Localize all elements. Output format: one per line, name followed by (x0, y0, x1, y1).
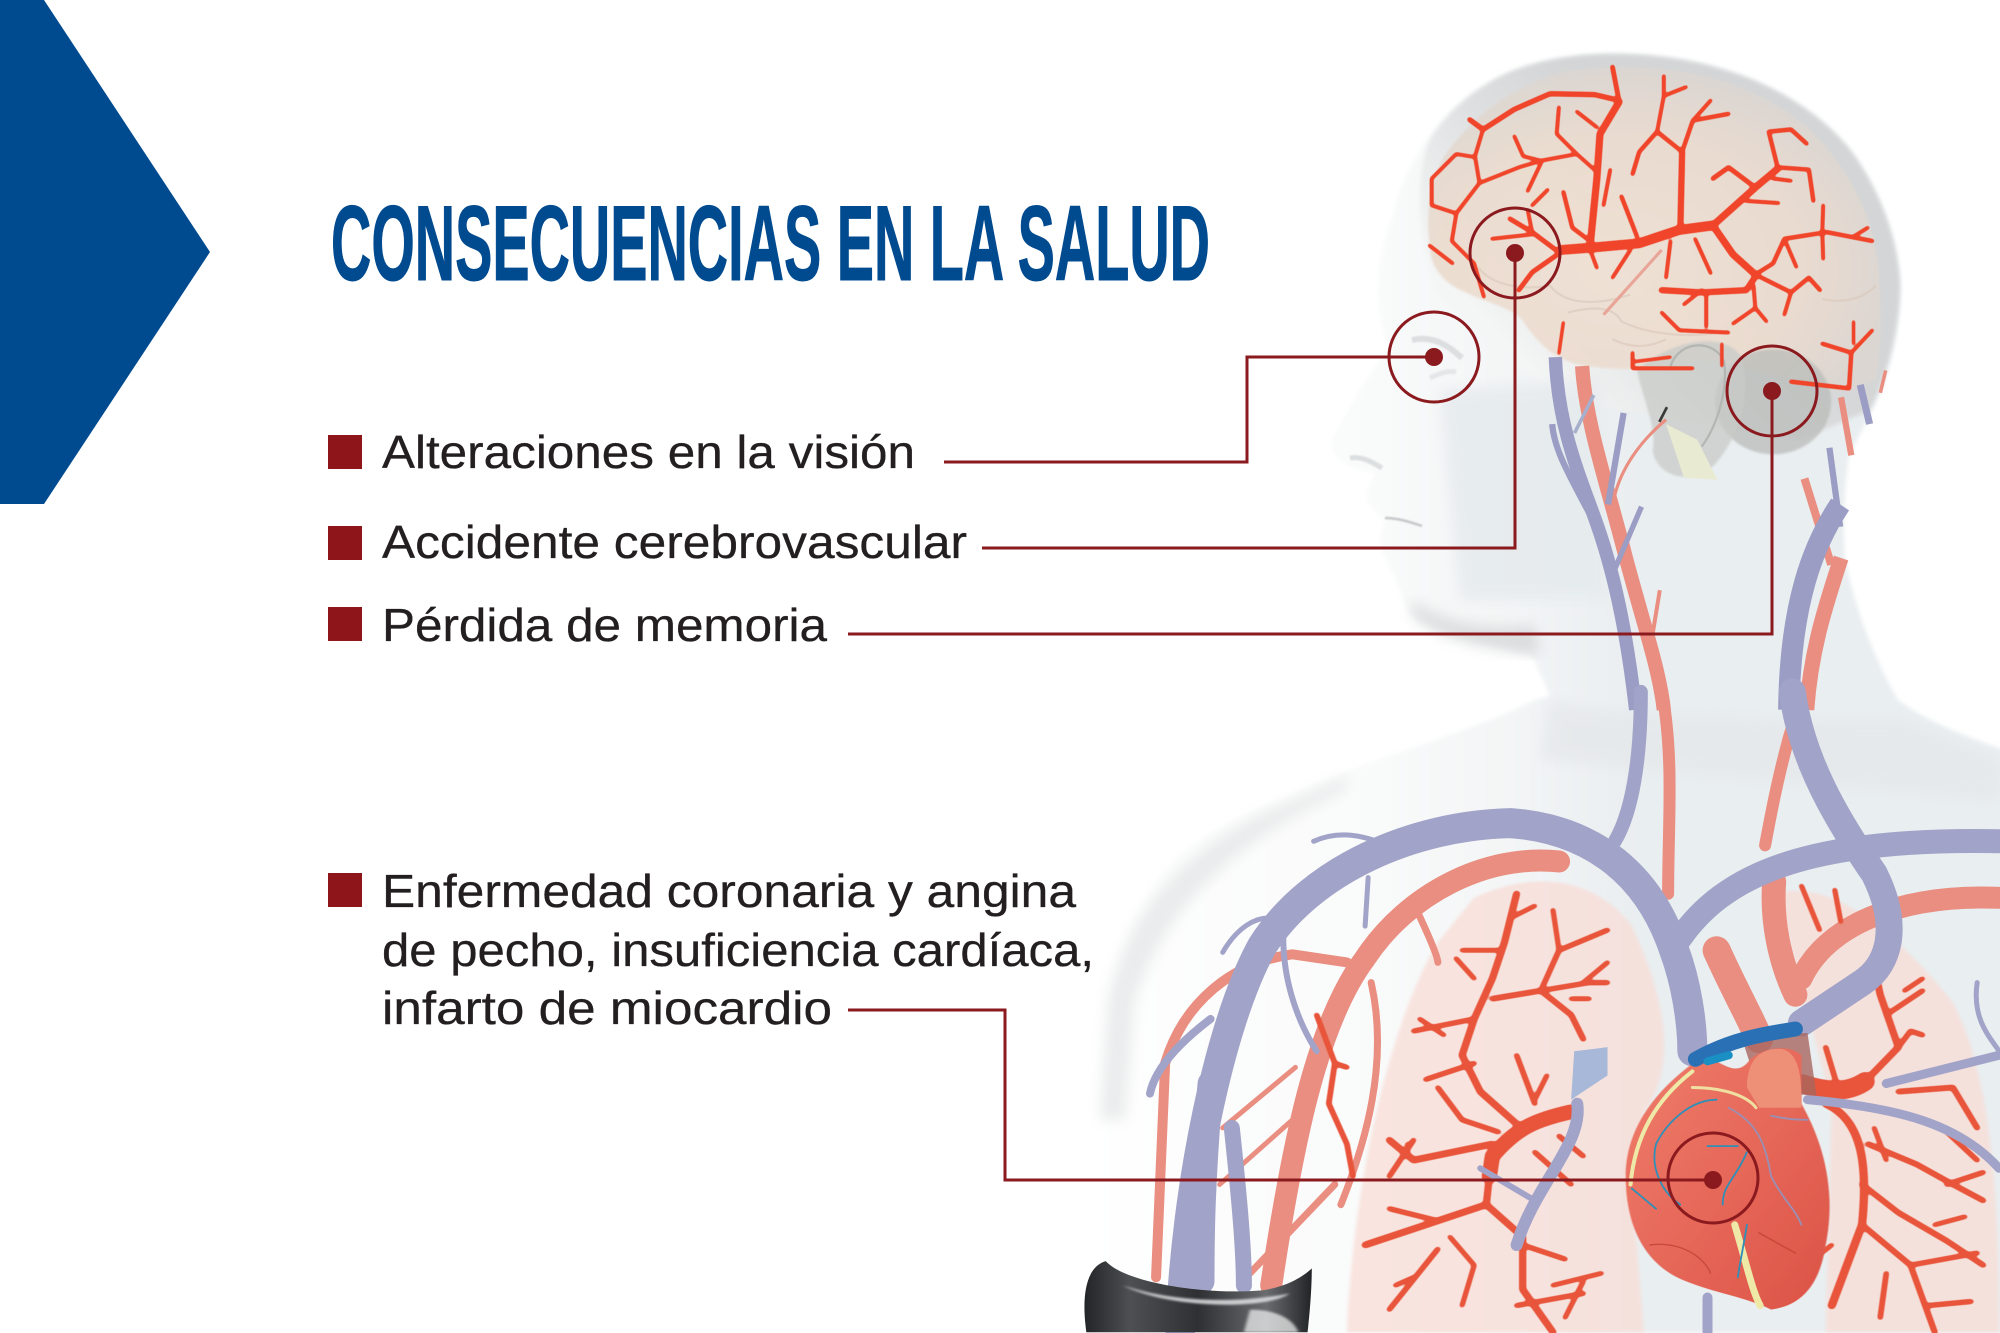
torso vessels and organs (1084, 692, 1999, 1332)
lungs (1347, 882, 1999, 1332)
label: Pérdida de memoria (382, 599, 827, 651)
facial features (1350, 339, 1462, 526)
bullet (328, 526, 362, 560)
callout: heart (848, 1010, 1758, 1223)
cerebellum and ear (1637, 341, 1831, 480)
anatomical figure (1068, 54, 2000, 1333)
chevron arrow (0, 0, 210, 504)
blood pressure cuff (1084, 1261, 1312, 1332)
label: Accidente cerebrovascular (382, 516, 967, 568)
body silhouette (1068, 54, 2000, 1333)
label: Alteraciones en la visión (382, 426, 915, 478)
neck arteries (1582, 366, 1886, 710)
label line 3: infarto de miocardio (382, 982, 832, 1034)
callout: memory (848, 346, 1817, 634)
fat bands (1631, 1071, 1692, 1184)
brain lobes (1428, 67, 1881, 391)
brain fold shading (1479, 268, 1876, 346)
arteries torso (1156, 692, 1999, 1285)
pulmonary valve (1571, 1047, 1608, 1100)
bullet (328, 607, 362, 641)
bullet (328, 435, 362, 469)
list item: stroke (328, 516, 967, 568)
great vessel (1695, 1029, 1795, 1059)
bronchi (1317, 886, 1983, 1332)
list item: memory (328, 599, 827, 651)
label line 2: de pecho, insuficiencia cardíaca, (382, 924, 1094, 976)
faded artery (1604, 250, 1662, 315)
list item: vision (328, 426, 915, 478)
jaw shadow (1412, 600, 1540, 655)
neck shading (1540, 700, 2000, 800)
callout: brain (982, 208, 1560, 548)
cheek shading (1440, 380, 1610, 600)
list item: heart (328, 865, 1094, 1034)
neck vessels (1552, 357, 1886, 710)
callout: eye (944, 312, 1479, 462)
heart (1626, 1029, 1830, 1310)
skull shading (1420, 54, 1900, 440)
brain (1428, 67, 1886, 710)
bullet (328, 873, 362, 907)
coronary vessels (1654, 1100, 1717, 1205)
neck veins (1552, 357, 1870, 710)
title: CONSECUENCIAS EN LA SALUD (331, 183, 1210, 303)
veins torso (1150, 692, 1999, 1332)
label: Enfermedad coronaria y angina (382, 865, 1076, 917)
brain arteries (1429, 67, 1872, 388)
shoulder shading (1100, 775, 1350, 1120)
